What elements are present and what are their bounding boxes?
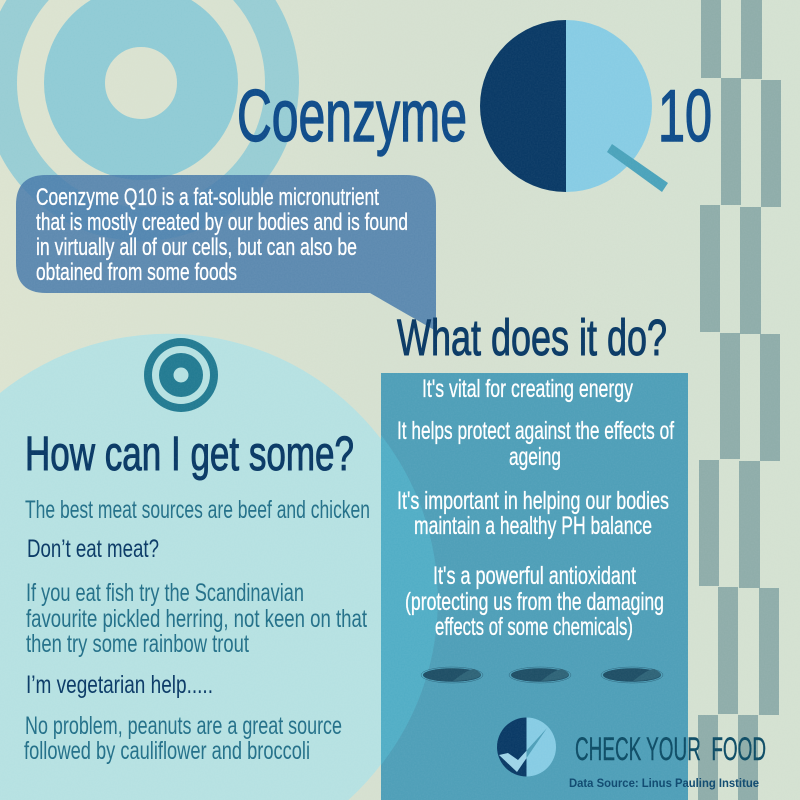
text block: benefits: It's vital for creating energy <box>422 375 633 403</box>
title: Coenzyme <box>237 76 467 157</box>
intro text <box>36 184 408 286</box>
large light circle panel <box>0 334 436 800</box>
text block: benefits: effects of some chemicals) <box>435 613 633 641</box>
icon: target <box>144 338 218 412</box>
speech bubble <box>16 175 436 331</box>
text block: benefits <box>397 375 674 641</box>
text block: food sources: then try some rainbow trout <box>26 630 249 658</box>
text block: benefits: ageing <box>509 443 561 471</box>
intro text: in virtually all of our cells, but can also be <box>36 234 357 261</box>
heading: how can I get some: How can I get some? <box>25 428 354 481</box>
title: 10 <box>658 76 712 157</box>
text block: benefits: (protecting us from the damaging <box>405 588 664 616</box>
text block: benefits: It's a powerful antioxidant <box>433 562 636 590</box>
icon: Q letter circle <box>480 20 668 192</box>
data source: Data Source: Linus Pauling Institue <box>569 776 759 790</box>
panel: what does it do box <box>381 373 688 800</box>
text block: benefits: maintain a healthy PH balance <box>414 512 652 540</box>
intro text: that is mostly created by our bodies and is found <box>36 209 408 236</box>
intro text: Coenzyme Q10 is a fat-soluble micronutrient <box>36 184 379 211</box>
text block: food sources: Don’t eat meat? <box>27 535 159 563</box>
text block: food sources: favourite pickled herring, not keen on that <box>26 605 367 633</box>
text block: food sources: followed by cauliflower and broccoli <box>24 737 310 765</box>
intro text: obtained from some foods <box>36 259 237 286</box>
heading: what does it do: What does it do? <box>397 309 667 366</box>
text block: benefits: It's important in helping our bodies <box>397 487 669 515</box>
text block: food sources <box>24 496 370 765</box>
text block: food sources: No problem, peanuts are a great source <box>25 712 342 740</box>
decorative concentric rings <box>0 0 282 224</box>
text block: benefits: It helps protect against the effects of <box>397 417 674 445</box>
icon: check your food logo <box>497 718 556 776</box>
text block: food sources: I’m vegetarian help..... <box>26 671 213 699</box>
icon: three dark discs <box>421 667 663 683</box>
text block: food sources: If you eat fish try the Scandinavian <box>26 579 304 607</box>
text block: food sources: The best meat sources are beef and chicken <box>25 496 370 524</box>
decorative stripes <box>698 0 781 800</box>
